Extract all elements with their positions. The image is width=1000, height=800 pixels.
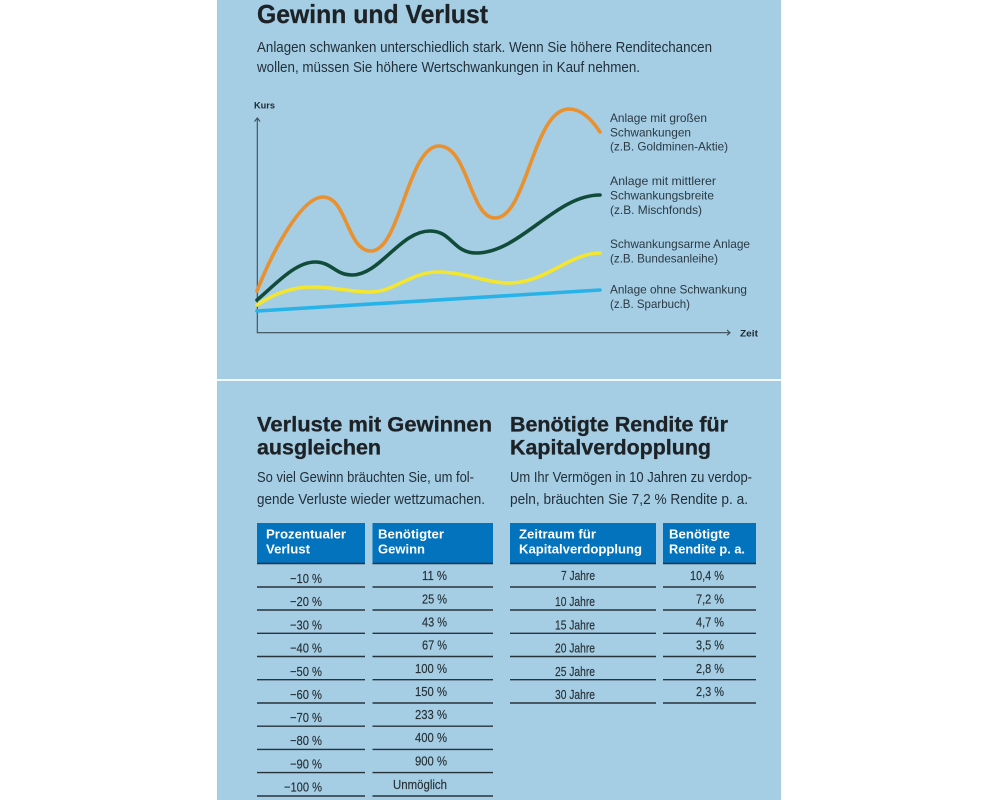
table rows: losses: 100 % [415, 661, 447, 676]
table header: loss: Prozentualer [266, 528, 346, 542]
table rows: losses: −90 % [290, 756, 322, 772]
table rows: doubling: 4,7 % [696, 614, 724, 630]
table header: required return [663, 523, 756, 563]
table rows: doubling: 20 Jahre [555, 640, 595, 656]
text: losses intro: gende Verluste wieder wettzumachen. [257, 491, 485, 508]
table rows: losses: 150 % [415, 684, 447, 699]
table rows: losses: 900 % [415, 754, 447, 768]
table rows: doubling: 7,2 % [696, 592, 724, 606]
table rows: losses: 400 % [415, 730, 447, 745]
table rows: doubling: 10 Jahre [555, 594, 595, 609]
line chart [254, 100, 758, 338]
heading: doubling: Kapitalverdopplung [510, 436, 711, 460]
label: no fluctuation: Anlage ohne Schwankung [610, 282, 747, 296]
label: low fluctuation: (z.B. Bundesanleihe) [610, 252, 718, 266]
label: high fluctuation [610, 111, 728, 154]
table rows: losses: 233 % [415, 707, 447, 722]
text: doubling intro: peln, bräuchten Sie 7,2 % Rendite p. a. [510, 491, 748, 508]
table rows: losses: −40 % [290, 640, 322, 656]
table rows: losses: Unmöglich [393, 777, 447, 792]
table rows: losses: −10 % [290, 571, 322, 586]
table rows: doubling: 2,3 % [696, 684, 724, 699]
table header: gain [372, 523, 493, 563]
table rows: losses: −30 % [290, 618, 322, 632]
table rows: losses: −80 % [290, 733, 322, 748]
heading: losses: Verluste mit Gewinnen [257, 414, 492, 436]
table header: loss [257, 523, 365, 563]
table rows: doubling: 30 Jahre [555, 687, 595, 702]
label: medium fluctuation [610, 174, 716, 217]
table rows: doubling: 2,8 % [696, 661, 724, 676]
heading: doubling [510, 414, 728, 460]
table rows: losses: 67 % [422, 638, 447, 652]
panel: losses and gains [257, 414, 493, 796]
text: losses intro [257, 469, 485, 508]
table rows: doubling [510, 564, 756, 703]
table rows: losses: −50 % [290, 664, 322, 679]
label: low fluctuation: Schwankungsarme Anlage [610, 237, 750, 251]
label: high fluctuation: Schwankungen [610, 126, 691, 140]
table header: required return: Benötigte [669, 528, 730, 542]
axes with arrows [254, 118, 730, 335]
panel: doubling capital [510, 414, 756, 703]
x axis label: Zeit [740, 328, 758, 338]
heading: losses: ausgleichen [257, 436, 381, 460]
table header: period: Kapitalverdopplung [519, 542, 642, 556]
table rows: doubling: 25 Jahre [555, 664, 595, 679]
table rows: doubling: 7 Jahre [561, 568, 595, 583]
label: medium fluctuation: Schwankungsbreite [610, 188, 714, 202]
table rows: doubling: 3,5 % [696, 638, 724, 652]
y axis label: Kurs [254, 100, 275, 110]
intro text: Anlagen schwanken unterschiedlich stark. Wenn Sie höhere Renditechancen [257, 39, 712, 56]
text: losses intro: So viel Gewinn bräuchten Sie, um fol- [257, 469, 474, 486]
heading: losses [257, 414, 492, 460]
label: high fluctuation: Anlage mit großen [610, 111, 707, 125]
line: no fluctuation [257, 290, 600, 311]
label: high fluctuation: (z.B. Goldminen-Aktie) [610, 140, 728, 154]
table rows: doubling: 10,4 % [690, 568, 724, 583]
table rows: losses: 11 % [422, 568, 447, 583]
table rows: losses: −60 % [290, 687, 322, 702]
text: doubling intro [510, 469, 752, 508]
table header: period [510, 523, 656, 563]
label: no fluctuation [610, 282, 747, 311]
table rows: losses: 25 % [422, 592, 447, 606]
text: doubling intro: Um Ihr Vermögen in 10 Jahren zu verdop- [510, 469, 752, 486]
table rows: doubling: 15 Jahre [555, 618, 595, 632]
table header: period: Zeitraum für [519, 528, 596, 542]
table rows: losses: −20 % [290, 594, 322, 609]
heading: doubling: Benötigte Rendite für [510, 414, 728, 436]
intro text [256, 39, 712, 76]
table rows: losses: 43 % [422, 614, 447, 630]
label: no fluctuation: (z.B. Sparbuch) [610, 297, 690, 311]
table rows: losses: −70 % [290, 710, 322, 725]
label: medium fluctuation: (z.B. Mischfonds) [610, 203, 702, 217]
table rows: losses: −100 % [284, 780, 322, 794]
table rows: losses [257, 564, 493, 796]
line: high fluctuation [257, 109, 600, 291]
table header: loss: Verlust [266, 542, 311, 556]
table header: required return: Rendite p. a. [669, 542, 745, 556]
table header: gain: Gewinn [378, 542, 425, 556]
panel: background [217, 0, 781, 800]
line: low fluctuation [257, 253, 600, 305]
intro text: wollen, müssen Sie höhere Wertschwankungen in Kauf nehmen. [256, 59, 640, 76]
table header: gain: Benötigter [378, 528, 444, 542]
line: medium fluctuation [257, 195, 600, 300]
label: low fluctuation [610, 237, 750, 266]
label: medium fluctuation: Anlage mit mittlerer [610, 174, 716, 188]
